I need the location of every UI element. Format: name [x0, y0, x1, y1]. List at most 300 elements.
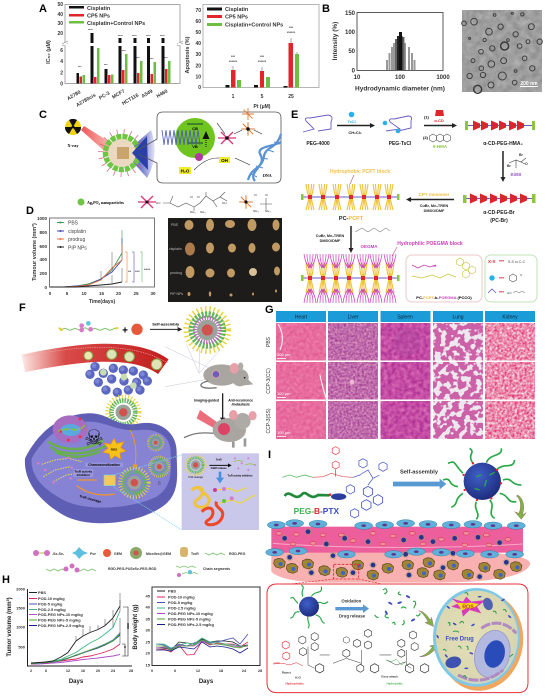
panel B: size distribution histogram: 10	[354, 75, 361, 81]
legend: body weight: POD-2.5 mg/kg	[168, 606, 196, 610]
mouse: irradiated	[184, 410, 257, 448]
panel A: apoptosis bar chart: ******	[258, 60, 267, 64]
column headers: Kidney	[502, 314, 518, 320]
self-assembly row	[59, 321, 182, 336]
arrow: down to vessel	[515, 495, 526, 519]
panel I: polymer prodrug scheme	[266, 447, 531, 696]
panel B: size distribution histogram: Hydrodynamic diameter (nm)	[355, 86, 445, 92]
panel H: body weight line chart: 15	[146, 662, 151, 668]
chain: alpha-CD-PEG-HMA3	[465, 120, 535, 147]
panel F: self-assembly and TrxR mechanism	[23, 309, 259, 530]
panel F label: F	[19, 302, 26, 314]
arrow: imaging-guided: /metastasis	[232, 403, 250, 407]
panel A: apoptosis bar chart: 30	[195, 52, 201, 58]
panel C: legend row: Cl	[190, 195, 193, 199]
arrow: oxidation	[335, 598, 369, 618]
legend: panel A left: CP5 NPs	[87, 14, 110, 20]
panel H: body weight line chart: 18	[219, 669, 223, 673]
mitochondria and organelles	[444, 596, 516, 680]
legend: panel A left	[69, 6, 145, 27]
panel H: tumor volume line chart	[6, 586, 133, 685]
panel D: tumour volume line chart: 0	[49, 291, 52, 296]
callout: PCCO structure box: PC-PCPT-b-POEGMA (PCCO)	[416, 295, 472, 300]
inset: TrxR inhibition: GEM release	[211, 466, 227, 470]
panel D: tumour volume line chart: **	[128, 269, 132, 274]
arrow: OEGMA step: OEGMA	[360, 244, 378, 249]
callout: drug release box: Hydrophobic	[285, 681, 304, 685]
panel E label: E	[291, 109, 298, 121]
legend: panel D	[57, 220, 87, 252]
panel H: tumor volume line chart: 500	[18, 644, 26, 650]
legend: tumor volume: POD-PEG NPs-2.5 mg/kg	[38, 623, 84, 628]
panel D: excised tumour photo: cisplatin	[169, 247, 182, 251]
panel A: apoptosis bar chart: 20	[195, 64, 201, 70]
panel A: IC50 bar chart: 0	[60, 82, 63, 88]
panel H: body weight line chart: 6	[174, 669, 176, 673]
panel C: legend row: Cl	[197, 195, 200, 199]
arrow: BiBB step: Br	[507, 164, 512, 168]
panel B: size distribution histogram	[332, 11, 450, 92]
panel A: IC50 bar chart: ****	[132, 34, 138, 38]
chain: alpha-CD-PEG-HMA3: α-CD-PEG-HMA₃	[483, 141, 523, 147]
scale bars: 100 μm	[277, 352, 291, 357]
tumour cell: TrxR cleavage	[79, 494, 102, 504]
panel F: legend: TrxR	[191, 552, 199, 556]
arrow: OEGMA step	[316, 226, 390, 253]
callout: H2O	[179, 167, 191, 174]
arrow: CPT monomer step: DMSO/DMF	[424, 209, 445, 213]
legend: body weight: POD-5 mg/kg	[168, 600, 193, 605]
panel B: TEM micrograph	[462, 10, 542, 93]
panel A: apoptosis bar chart: 1	[232, 94, 235, 100]
panel A: IC50 bar chart: A2780cis	[75, 92, 97, 109]
label: TrxR activity inhibition: inhibition	[77, 473, 90, 477]
panel A: IC50 bar chart: ****	[118, 34, 124, 38]
step: PEG-TsCl	[383, 116, 412, 147]
legend: tumor volume: POD-10 mg/kg	[38, 596, 65, 601]
panel A: IC50 bar chart: 6	[60, 48, 63, 54]
arrow: alpha-CD and 9-HMA step: 9-HMA	[433, 144, 448, 149]
legend: panel A right	[207, 7, 283, 28]
panel H: tumor volume line chart: 6	[45, 669, 47, 673]
panel A: IC50 bar chart: H460	[156, 88, 169, 100]
panel A: apoptosis bar chart: ***	[260, 55, 265, 59]
structure: PEG-B-PTX	[282, 447, 387, 518]
panel C: X-ray nanoparticle scheme: DNA	[263, 173, 272, 178]
arrow: BiBB step	[500, 151, 528, 182]
heading: hydrophilic POEGMA block: Hydrophilic POEGMA block	[397, 241, 463, 247]
panel A: IC50 bar chart: HCT116	[121, 92, 140, 107]
arrow: BiBB step: O	[525, 162, 528, 166]
callout: drug release box	[267, 584, 531, 696]
legend: tumor volume: POD-5 mg/kg	[38, 602, 63, 606]
panel C: X-ray nanoparticle scheme	[65, 107, 281, 183]
chemistry: PEG prodrug structures	[273, 629, 429, 673]
arrow: imaging-guided	[194, 393, 253, 422]
chain: alpha-CD-PEG-Br: (PC-Br)	[490, 218, 508, 224]
panel B: size distribution histogram: 50	[348, 49, 356, 55]
panel H: tumor volume line chart: 16	[81, 669, 85, 673]
endothelial cells	[266, 520, 525, 558]
endoplasmic reticulum	[48, 440, 108, 457]
scale bars: 100 μm	[277, 430, 291, 435]
legend: panel D: prodrug	[68, 237, 85, 243]
panel C: legend row: NH₃	[253, 209, 259, 213]
panel H: body weight line chart: 0	[151, 669, 153, 673]
panel F: legend: GEM	[114, 552, 122, 556]
panel H label: H	[2, 574, 10, 586]
panel H: tumor volume line chart: 2	[30, 669, 32, 673]
blood vessel and tumor tissue	[266, 520, 530, 587]
panel A: IC50 bar chart: 4	[60, 59, 63, 65]
panel A: IC50 bar chart: ****	[88, 28, 94, 32]
panel C: legend row: Ag₃PO₄ nanoparticles	[87, 200, 124, 205]
heading: hydrophilic POEGMA block	[392, 241, 463, 256]
legend: panel D: cisplatin	[68, 229, 86, 235]
panel D: excised tumour photo: prodrug	[170, 271, 182, 275]
nucleus	[469, 626, 515, 682]
legend: body weight: POD-PEG NPs-2.5 mg/kg	[168, 622, 214, 627]
panel A: IC50 bar chart: ***	[164, 56, 168, 60]
legend: panel A right: Cisplatin	[225, 7, 249, 13]
arrow: BiBB step: BiBB	[510, 172, 522, 177]
panel D: tumour volume line chart	[31, 216, 156, 305]
panel D: excised tumour photo: PIP NPs	[170, 292, 183, 296]
panel H: body weight line chart: Body weight (g)	[133, 604, 139, 650]
callout: drug release box: H₂O	[295, 675, 302, 679]
heading: hydrophobic PCPT block: Hydrophobic PCPT block	[330, 169, 390, 175]
self-assembly row: +	[122, 325, 128, 336]
panel F: legend: Micelles@GEM	[146, 552, 171, 556]
arrow: OEGMA step: CuBr, Me₆TREN	[316, 234, 345, 238]
arrow: CPT monomer step	[406, 192, 454, 213]
legend: body weight	[157, 588, 214, 627]
label: chemosensitization: Chemosensitization	[88, 463, 120, 467]
panel A: IC50 bar chart: ****	[146, 34, 152, 38]
arrow: CPT monomer step: CuBr, Me₆TREN	[420, 204, 449, 208]
panel G label: G	[265, 304, 274, 316]
panel B: size distribution histogram: 150	[345, 11, 356, 17]
arrow: self-assembly	[393, 470, 446, 489]
panel H: body weight line chart: 28	[258, 669, 262, 673]
panel C: legend row: OH	[222, 201, 226, 205]
panel C: legend row: NH₃	[265, 209, 271, 213]
panel A: apoptosis bar chart: 10	[195, 74, 201, 80]
tumour cluster	[85, 362, 152, 397]
arrow: TsCl step	[337, 112, 375, 135]
protein structure	[192, 487, 223, 525]
callout: OH radical: OH	[221, 158, 228, 163]
panel H: tumor volume line chart: Days	[69, 679, 84, 685]
panel H: tumor volume line chart: 28	[129, 669, 133, 673]
legend: body weight: POD-10 mg/kg	[168, 594, 195, 600]
icon: ROS burst	[103, 438, 126, 460]
inset: TrxR inhibition	[182, 453, 259, 530]
tumour cell	[25, 413, 177, 523]
tumor cells	[274, 558, 522, 580]
icon: DNA helix	[248, 134, 281, 181]
icon: skull and crossbones: ☠	[84, 427, 104, 452]
panel A: apoptosis bar chart: 0	[198, 85, 201, 91]
arrow: alpha-CD and 9-HMA step	[423, 110, 457, 149]
panel H: body weight line chart: Days	[199, 679, 214, 685]
label: TrxR activity inhibition	[73, 469, 93, 477]
column headers: Spleen	[397, 314, 413, 320]
panel D: tumour volume line chart: ****	[144, 267, 151, 272]
panel H: body weight line chart: 40	[146, 604, 151, 610]
panel G: histology grid	[266, 311, 535, 439]
callout: symbol key box: S	[520, 273, 522, 277]
panel C: legend row: HO	[156, 201, 161, 205]
panel A: apoptosis bar chart: ***	[289, 26, 294, 30]
panel F: legend: RGD-PEG	[229, 552, 246, 556]
panel B label: B	[322, 3, 330, 15]
structure: PEG-B-PTX: PEG-B-PTX	[294, 506, 339, 516]
blood vessel	[23, 347, 168, 370]
arrow: TsCl step: TsCl	[347, 119, 356, 124]
panel E: synthesis scheme	[301, 110, 537, 303]
legend: tumor volume	[29, 590, 84, 628]
callout: OH radical	[219, 157, 230, 163]
icon: radiation symbol	[65, 119, 81, 135]
panel A: IC50 bar chart: 20	[57, 31, 63, 37]
callout: symbol key box: X-X	[488, 259, 496, 264]
tumour cell: S	[158, 480, 161, 485]
panel A: IC50 bar chart: A2780	[66, 89, 82, 102]
panel A: apoptosis bar chart: Apoptosis (%)	[185, 36, 191, 73]
panel H: body weight line chart: 12	[196, 669, 200, 673]
chemistry: PEG prodrug structures: -O-NH	[273, 663, 280, 665]
panel D: tumour volume line chart: 600	[39, 244, 47, 249]
arrow: BiBB step: Br	[519, 153, 524, 157]
legend: tumor volume: PBS	[38, 590, 46, 595]
panel D: tumour volume line chart: Tumour volume (mm³)	[31, 223, 38, 281]
tumor cell with free drug: Free Drug	[446, 636, 474, 642]
callout: H2O: H₂O	[181, 168, 190, 174]
panel C: legend row: NH₃	[200, 210, 206, 214]
panel C: legend row: Cl	[254, 193, 257, 197]
arrow: imaging-guided: Imaging-guided	[194, 399, 219, 403]
panel D: tumour volume line chart: Time(days)	[89, 299, 115, 305]
column headers: Heart	[295, 314, 308, 320]
step: PEG-4000	[303, 115, 332, 147]
panel H: tumor volume line chart: 1000	[16, 624, 26, 630]
red blood cells	[276, 531, 511, 547]
column headers	[276, 311, 535, 322]
arrow: CPT monomer step: CPT monomer	[419, 192, 450, 197]
micelle: assembled nanoparticle	[187, 309, 228, 350]
row labels: PBS	[266, 336, 272, 347]
panel C: legend row: Cl	[265, 193, 268, 197]
panel D: tumour volume line chart: 0	[44, 285, 47, 290]
arrow: imaging-guided: Anti-recurrence	[228, 399, 253, 403]
panel A: apoptosis bar chart: ******	[287, 31, 296, 35]
nucleus	[53, 415, 87, 443]
micelle: PEG-B-PTX	[443, 448, 521, 519]
panel H: tumor volume line chart: 20	[96, 669, 100, 673]
legend: body weight: POD-PEG NPs-5 mg/kg	[168, 616, 211, 622]
icon: ROS burst: ROS	[111, 447, 117, 451]
legend: panel D: PBS	[68, 220, 79, 226]
arrow: TsCl step: CH₂Cl₂	[348, 130, 362, 135]
panel A: IC50 bar chart: ***	[122, 49, 126, 53]
callout: drug release box: Easy attack	[381, 674, 398, 678]
panel C: X-ray nanoparticle scheme: CB	[192, 126, 198, 131]
panel H: body weight line chart: 25	[146, 640, 151, 644]
panel I label: I	[268, 449, 271, 461]
panel C label: C	[39, 109, 47, 121]
panel A: apoptosis bar chart: 5	[261, 94, 264, 100]
panel A: IC50 bar chart: 40	[57, 12, 63, 18]
panel D: tumour volume line chart: 20	[116, 291, 121, 296]
chain: PC-PCPT: PC-PCPT	[339, 216, 364, 222]
panel H: body weight line chart: 20	[146, 650, 151, 656]
panel A: IC50 bar chart: ****	[160, 34, 166, 38]
panel A: IC50 bar chart: PC-3	[98, 90, 111, 101]
arrow: alpha-CD and 9-HMA step: (1)	[424, 114, 430, 120]
panel C: legend row: NH₃	[190, 210, 196, 214]
panel C: X-ray nanoparticle scheme: X-ray	[67, 143, 79, 148]
panel D: tumour volume line chart: 30	[150, 291, 156, 296]
panel F: legend: Chain segments	[203, 567, 230, 571]
panel H: tumor volume line chart: 1500	[16, 606, 26, 610]
chain: PC-PCPT-b-POEGMA	[301, 254, 400, 303]
panel A: IC50 bar chart	[46, 2, 183, 109]
panel B: size distribution histogram: Intensity (%)	[332, 22, 339, 60]
panel D: tumour volume line chart: ***	[135, 269, 140, 274]
panel C: legend row	[78, 192, 272, 214]
legend: panel D: PIP NPs	[68, 246, 87, 252]
panel D: tumour volume line chart: 400	[39, 257, 47, 262]
panel F: legend: Por	[90, 552, 96, 556]
legend: tumor volume: POD-PEG NPs-5 mg/kg	[38, 618, 81, 622]
panel H: tumor volume line chart: 24	[111, 669, 116, 673]
column headers: Liver	[348, 314, 359, 320]
arrow: alpha-CD and 9-HMA step: (2)	[423, 135, 429, 140]
panel A: IC50 bar chart: 30	[57, 21, 63, 27]
panel A: apoptosis bar chart: ***	[231, 55, 236, 59]
panel A: IC50 bar chart: 2	[60, 70, 63, 76]
panel A: apoptosis bar chart: Pt (μM)	[254, 104, 271, 110]
inset: TrxR inhibition: TrxR	[216, 458, 222, 462]
panel B: size distribution histogram: 0	[352, 68, 356, 74]
panel A: IC50 bar chart: ***	[136, 56, 140, 60]
legend: panel A right: CP5 NPs	[225, 14, 248, 20]
panel D: excised tumour photo: PBS	[171, 223, 179, 227]
panel D: tumour volume line chart: 800	[39, 230, 47, 235]
tissue tiles	[276, 323, 535, 439]
callout: symbol key box	[485, 255, 537, 302]
panel A: IC50 bar chart: ***	[78, 65, 82, 69]
panel A: IC50 bar chart: 50	[57, 2, 63, 8]
scale bars: 100 μm	[277, 391, 291, 396]
panel A: IC50 bar chart: ***	[104, 63, 108, 67]
tumor cell with free drug	[432, 586, 531, 696]
panel B: size distribution histogram: 1000	[436, 75, 450, 81]
inset: TrxR inhibition: TrxR activity inhibition	[227, 474, 253, 477]
arrow: self-assembly: Self-assembly	[400, 470, 439, 476]
panel A: IC50 bar chart: MCF7	[111, 88, 126, 101]
callout: drug release box: Hydrophilic	[386, 681, 403, 685]
row labels	[266, 336, 272, 434]
free drug fragments	[436, 596, 512, 669]
panel A: apoptosis bar chart: ******	[229, 60, 238, 64]
panel H: tumor volume line chart: ***	[127, 623, 133, 629]
panel H: tumor volume line chart: 2000	[16, 586, 26, 592]
legend: panel A left: Cisplatin+Control NPs	[87, 21, 145, 27]
panel A: apoptosis bar chart: 50	[195, 30, 201, 36]
panel F: legend: RGD-PEG-PUSeSe-PEG-RGD	[108, 567, 157, 571]
panel H: body weight line chart: 45	[146, 594, 151, 598]
released drug fragments	[375, 589, 420, 625]
panel A: apoptosis bar chart: 25	[288, 94, 294, 100]
icon: ROS burst in cell: ROS	[462, 605, 474, 611]
legend: panel A left: Cisplatin	[87, 6, 111, 12]
panel F: legend	[33, 547, 246, 577]
panel F: legend: -Se-Se-	[52, 552, 65, 556]
panel A: apoptosis bar chart	[185, 4, 319, 110]
legend: panel A right: Cisplatin+Control NPs	[225, 22, 283, 28]
panel A: IC50 bar chart: A549	[141, 88, 154, 100]
mouse: injected	[201, 362, 253, 388]
panel H: tumor volume line chart: 12	[66, 669, 70, 673]
row labels: CCP-3(CC)	[266, 368, 272, 394]
arrow: alpha-CD and 9-HMA step: α-CD	[434, 118, 444, 123]
panel A: IC50 bar chart: ***	[150, 57, 154, 61]
chain: PC-PCPT	[301, 184, 400, 222]
callout: symbol key box: HO	[507, 291, 512, 295]
panel D: tumour volume line chart: 15	[99, 291, 104, 296]
column headers: Lung	[452, 314, 464, 320]
legend: tumor volume: POD-2.5 mg/kg	[38, 607, 66, 612]
panel D: excised tumour photo	[168, 218, 282, 302]
step: PEG-TsCl: PEG-TsCl	[389, 141, 412, 147]
panel A label: A	[39, 3, 47, 15]
panel A: IC50 bar chart: IC₅₀ (μM)	[46, 40, 52, 64]
panel H: tumor volume line chart: Tumor volume (mm³)	[6, 597, 13, 657]
inset: TrxR inhibition: TrxR cleavage	[188, 476, 204, 479]
step: PEG-4000: PEG-4000	[306, 141, 330, 147]
panel B: TEM micrograph: 200 nm	[520, 81, 538, 87]
legend: tumor volume: POD-PEG NPs-10 mg/kg	[38, 612, 83, 617]
panel A: apoptosis bar chart: 40	[195, 41, 201, 47]
scale bars	[277, 352, 291, 437]
panel B: size distribution histogram: 100	[345, 30, 356, 36]
arrow: OEGMA step: DMSO/DMF	[320, 239, 341, 243]
legend: body weight: POD-PEG NPs-10 mg/kg	[168, 611, 213, 616]
panel C: X-ray nanoparticle scheme: VB	[192, 144, 198, 149]
heading: hydrophobic PCPT block	[330, 169, 390, 184]
panel D: tumour volume line chart: 200	[39, 271, 47, 276]
panel B: size distribution histogram: 100	[395, 75, 406, 81]
panel H: body weight line chart: 35	[146, 616, 151, 622]
micelle: circulating	[108, 397, 139, 428]
panel D: tumour volume line chart: 10	[81, 291, 87, 296]
panel H: tumor volume line chart: *	[124, 646, 126, 652]
micelle: small	[290, 585, 328, 628]
callout: drug release box: Reject	[282, 670, 291, 674]
panel H: body weight line chart: 30	[146, 628, 151, 632]
panel D: tumour volume line chart: 1000	[37, 216, 47, 221]
arrow: oxidation: Drug release	[339, 613, 366, 618]
panel D label: D	[26, 205, 34, 217]
chain: alpha-CD-PEG-Br	[463, 194, 536, 224]
callout: PCCO structure box	[406, 255, 482, 302]
drug nanoparticles	[282, 529, 509, 580]
row labels: CCP-3(SS)	[266, 408, 272, 434]
callout: symbol key box: S-S or C-C	[508, 260, 526, 264]
panel H: body weight line chart: 24	[242, 669, 247, 673]
